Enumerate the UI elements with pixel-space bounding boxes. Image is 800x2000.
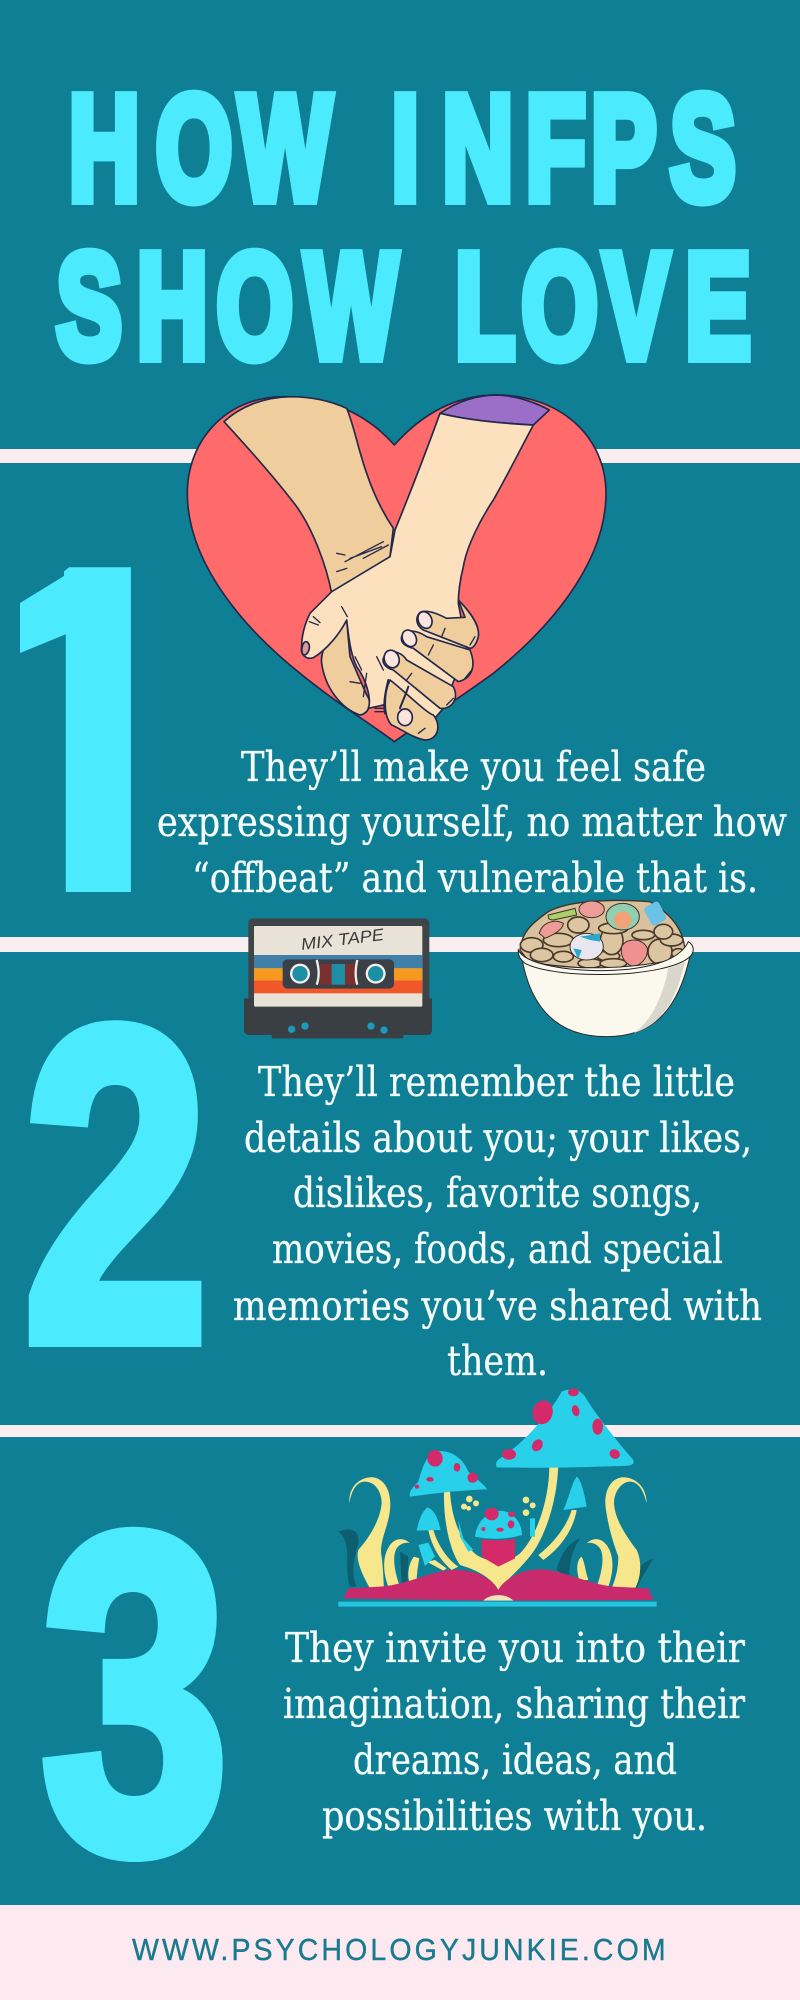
open book: [343, 1569, 653, 1601]
small spore clusters: [461, 1496, 536, 1516]
right arm and hand: [301, 413, 533, 723]
text: point 2: them.: [447, 1337, 548, 1385]
title: HOW INFPS: [69, 64, 735, 231]
icon: heart with holding hands: [187, 395, 606, 742]
bowl body: [522, 953, 691, 1037]
number 3: 3: [41, 1443, 229, 1945]
pink spots: [415, 1388, 622, 1532]
footer band: [0, 1905, 800, 2000]
number 1: [20, 567, 131, 892]
tape window: [283, 959, 394, 989]
centre mushroom stalk: [482, 1538, 515, 1567]
lower palm of left hand: [321, 620, 369, 715]
icon: mix tape cassette: [244, 918, 432, 1038]
left arm: [224, 397, 393, 593]
title: [57, 64, 751, 389]
text: point 1: [157, 743, 787, 902]
yellow tendrils and stalks: [349, 1465, 647, 1590]
number 2: 2: [23, 937, 209, 1434]
text: point 3: possibilities with you.: [322, 1792, 707, 1840]
text: point 3: dreams, ideas, and: [353, 1736, 677, 1784]
text: point 3: [283, 1624, 745, 1840]
marshmallows: [548, 908, 577, 920]
divider bars: [0, 449, 800, 1437]
text: point 2: [233, 1058, 762, 1385]
text: point 3: They invite you into their: [285, 1624, 745, 1672]
text: point 2: dislikes, favorite songs,: [293, 1169, 702, 1217]
icon: mushrooms growing from open book: [338, 1388, 657, 1607]
heart: [187, 395, 606, 742]
label text: MIX TAPE: [300, 925, 386, 954]
dark background foliage: [338, 1529, 653, 1588]
footer url: WWW.PSYCHOLOGYJUNKIE.COM: [132, 1933, 666, 1967]
fingers of left hand: [417, 600, 479, 648]
icon: cereal bowl: [518, 900, 693, 1037]
cyan caps: [410, 1390, 634, 1566]
text: point 1: They’ll make you feel safe: [241, 743, 706, 791]
bowl rim: [518, 942, 693, 975]
cereal rings: [520, 917, 685, 968]
sleeve: [440, 395, 549, 425]
title: SHOW LOVE: [57, 222, 751, 389]
